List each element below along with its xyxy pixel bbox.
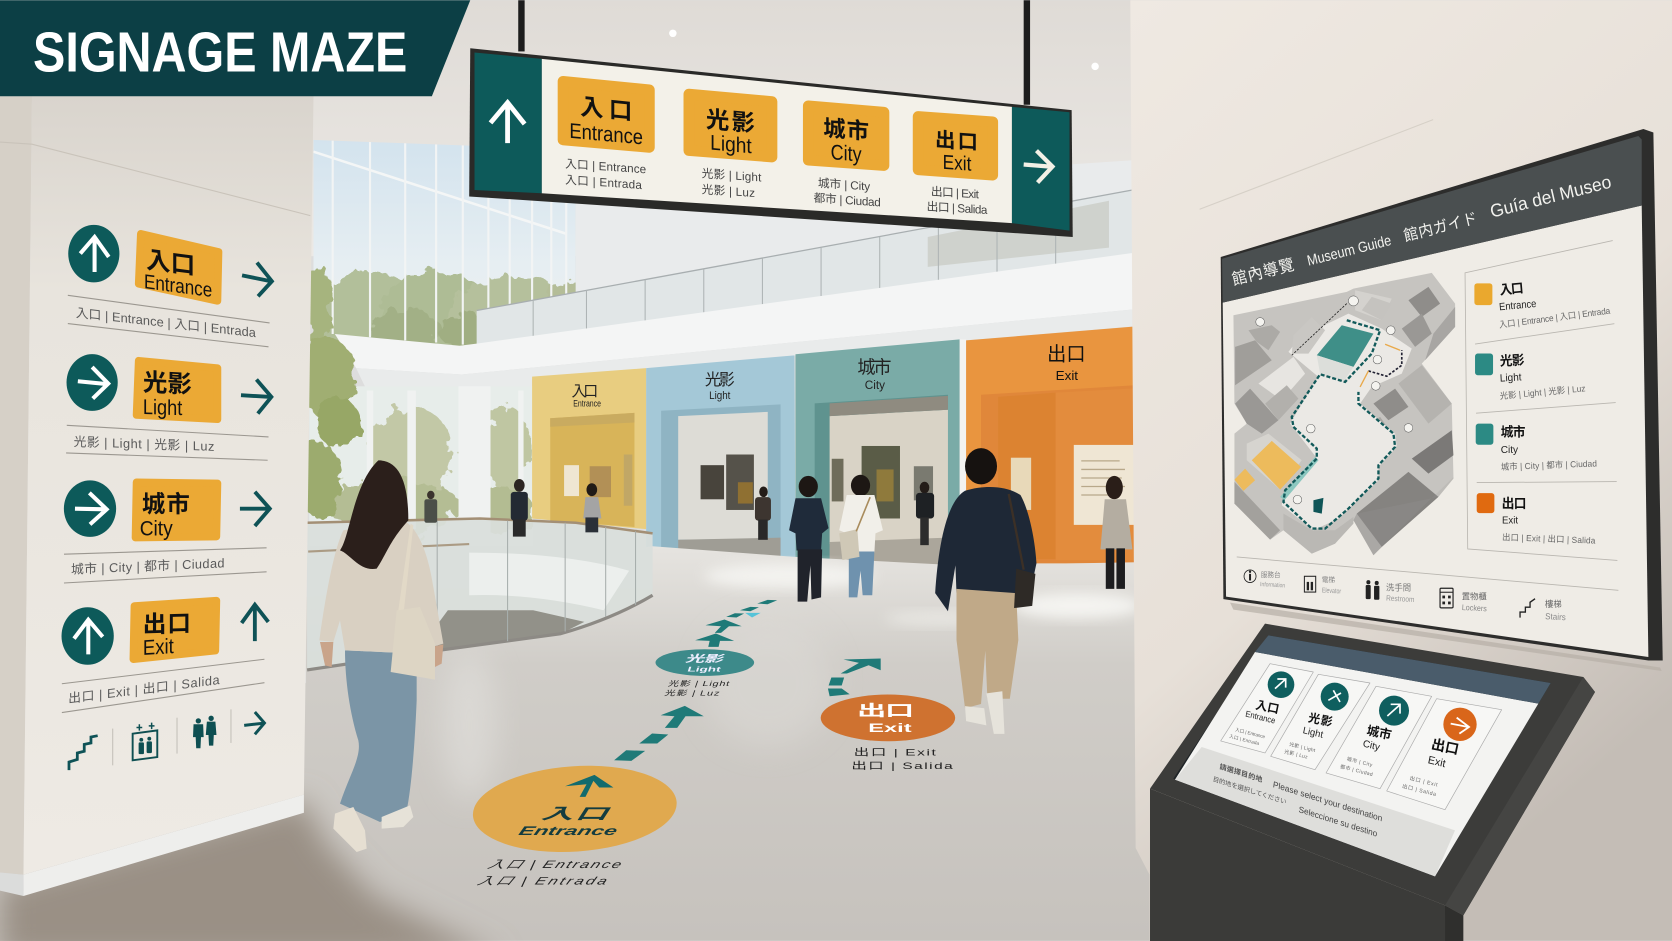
floor marker: Entrance: 入口 | Entrance xyxy=(485,859,624,871)
sign panel: Entrance: Entrance xyxy=(569,119,643,149)
kiosk card: City: 都市 | Ciudad xyxy=(1340,763,1374,778)
wall sign: City row: 城市 | City | 都市 | Ciudad xyxy=(71,555,225,577)
map key icons row: 樓梯 xyxy=(1545,598,1562,609)
floor marker: Light: Light xyxy=(686,666,722,673)
sign panel: Entrance: 入口 | Entrada xyxy=(565,174,642,192)
kiosk body xyxy=(1150,624,1595,941)
map key icons row: 電梯 xyxy=(1322,575,1335,584)
legend: City: City xyxy=(1501,445,1519,456)
up arrow xyxy=(491,103,525,143)
sign panel: City: 都市 | Ciudad xyxy=(814,191,881,209)
kiosk card: City: 城市 xyxy=(1365,723,1393,742)
floor marker: Light: 光影 | Luz xyxy=(664,689,722,697)
wall sign: Light row: 光影 xyxy=(143,369,192,399)
legend: Light: 光影 xyxy=(1499,352,1525,369)
wall sign: Light row: 光影 | Light | 光影 | Luz xyxy=(74,434,214,454)
sign panel: Entrance: 入口 | Entrance xyxy=(565,158,646,176)
kiosk prompt text: Seleccione su destino xyxy=(1298,804,1378,839)
panel: orange gallery bay Exit xyxy=(960,327,1135,565)
floor marker: Light: 光影 xyxy=(684,654,727,665)
sign panel: City: 城市 xyxy=(823,115,869,144)
wall sign: Exit row: Exit xyxy=(143,634,174,660)
panel: curved atrium glass railing xyxy=(307,518,653,670)
kiosk card: City: 城市 | City xyxy=(1346,755,1373,769)
kiosk card: Exit xyxy=(1387,699,1502,810)
header band: 館内ガイド xyxy=(1402,210,1479,245)
map key icons row: 置物櫃 xyxy=(1462,590,1487,601)
legend: City xyxy=(1476,424,1597,472)
legend: Entrance: Entrance xyxy=(1499,299,1537,313)
kiosk card: City xyxy=(1326,686,1432,789)
legend: City: 城市 xyxy=(1501,424,1525,440)
legend: Entrance xyxy=(1474,280,1611,330)
floor marker: Light xyxy=(655,649,754,697)
floor marker: Exit: Exit xyxy=(868,722,913,735)
panel: white upper wall xyxy=(576,160,1132,320)
sign panel: Exit: Exit xyxy=(943,152,972,176)
legend divider xyxy=(1475,324,1614,344)
kiosk card: Exit: 出口 xyxy=(1430,736,1460,757)
panel: yellow gallery bay Entrance xyxy=(532,368,646,529)
legend: Exit: Exit xyxy=(1502,515,1518,527)
panel: lower atrium window with trees xyxy=(310,386,533,522)
sign panel: Light: 光影 | Light xyxy=(702,166,762,184)
floor marker: Exit: 出口 | Salida xyxy=(851,760,954,771)
legend: Exit: 出口 | Exit | 出口 | Salida xyxy=(1502,531,1596,546)
panel: blue gallery bay Light: Light xyxy=(709,390,731,402)
legend frame xyxy=(1465,241,1617,560)
sign panel: Entrance xyxy=(563,81,649,192)
floor marker: Exit xyxy=(821,695,955,771)
visitor in white shirt xyxy=(839,475,883,597)
sign panel: Exit: 出口 xyxy=(935,128,978,154)
wall sign: Entrance row: Entrance xyxy=(144,271,212,302)
header band: Museum Guide xyxy=(1306,233,1393,270)
wall sign: Light row xyxy=(66,354,271,460)
map key icons row: Information xyxy=(1260,581,1286,590)
accent blue chevron xyxy=(745,613,761,618)
isometric floor map xyxy=(1233,273,1455,555)
legend: Light: Light xyxy=(1500,372,1522,385)
legend: Entrance: 入口 xyxy=(1499,280,1524,298)
kiosk card: Entrance: 入口 | Entrance xyxy=(1235,727,1266,740)
interactive touchscreen kiosk xyxy=(1150,624,1595,941)
panel: blue gallery bay Light xyxy=(646,355,795,558)
title banner xyxy=(0,0,470,96)
kiosk card: Light: 光影 | Light xyxy=(1289,741,1316,754)
wall sign: Entrance row: 入口 xyxy=(146,247,195,280)
visitor in navy shirt xyxy=(789,476,829,602)
wall sign: Exit row xyxy=(62,601,268,713)
panel: polished floor xyxy=(0,546,1157,941)
kiosk card: Exit: 出口 | Salida xyxy=(1402,782,1437,798)
sign panel: Light: 光影 | Luz xyxy=(702,182,755,200)
legend divider xyxy=(1476,403,1616,413)
kiosk card: City: City xyxy=(1362,739,1381,753)
floor marker: Exit: 出口 xyxy=(857,702,914,719)
floor marker: Entrance xyxy=(470,759,680,888)
foreground man with messenger bag xyxy=(935,448,1036,734)
legend: City: 城市 | City | 都市 | Ciudad xyxy=(1501,457,1597,472)
museum guide wall board xyxy=(1221,129,1663,671)
legend divider xyxy=(1477,482,1617,483)
sign panel: Entrance: 入口 xyxy=(580,93,632,125)
kiosk card: Light: Light xyxy=(1302,725,1324,741)
foreground tree beside left wall xyxy=(299,262,358,518)
kiosk card: Entrance: 入口 | Entrada xyxy=(1229,734,1260,747)
kiosk card: Exit: Exit xyxy=(1427,754,1447,770)
panel: blue gallery bay Light: 光影 xyxy=(705,371,735,389)
sign panel: City: City xyxy=(831,140,862,167)
floor graphics: wayfinding decals xyxy=(470,600,955,888)
wall sign: Exit row: 出口 xyxy=(143,610,191,638)
hanging directory sign xyxy=(469,0,1073,237)
kiosk card: Light xyxy=(1271,674,1370,770)
floor marker: Entrance: Entrance xyxy=(517,825,619,838)
wall sign: service icons row xyxy=(69,709,264,770)
header band: Guía del Museo xyxy=(1488,171,1613,222)
map key icons row: 洗手間 xyxy=(1386,581,1411,593)
foreground woman with tote bag xyxy=(319,460,443,852)
kiosk prompt text: Please select your destination xyxy=(1272,779,1383,823)
header band xyxy=(1222,136,1642,303)
floor marker: Entrance: 入口 xyxy=(538,805,616,822)
sign panel: Light xyxy=(689,94,772,200)
map key icons row: Restroom xyxy=(1386,593,1415,604)
right arrow xyxy=(1024,151,1052,183)
ceiling spot lights xyxy=(669,30,1099,70)
sign panel: Light: Light xyxy=(710,131,752,158)
wall sign: Entrance row xyxy=(68,225,272,347)
panel: orange gallery bay Exit: Exit xyxy=(1056,368,1078,383)
legend: Exit xyxy=(1477,493,1596,546)
sign panel: Exit: 出口 | Exit xyxy=(931,184,980,201)
sign panel: City: 城市 | City xyxy=(818,176,870,194)
panel: orange gallery bay Exit: 出口 xyxy=(1047,344,1086,366)
map key icons row: 服務台 xyxy=(1261,570,1281,579)
kiosk card: Light: 光影 xyxy=(1307,711,1334,729)
kiosk card: Entrance: 入口 xyxy=(1254,698,1281,716)
legend: Entrance: 入口 | Entrance | 入口 | Entrada xyxy=(1498,305,1611,330)
board frame xyxy=(1221,129,1663,660)
kiosk card: Light: 光影 | Luz xyxy=(1284,748,1309,761)
map key icons row: Lockers xyxy=(1462,603,1487,613)
panel: yellow gallery bay Entrance: 入口 xyxy=(572,383,598,400)
panel: right wall xyxy=(1130,0,1672,941)
legend: Light xyxy=(1475,352,1586,401)
kiosk prompt text: 目的地を選択してください xyxy=(1212,774,1287,806)
map key icons row: Stairs xyxy=(1545,611,1566,622)
kiosk card: Exit: 出口 | Exit xyxy=(1409,774,1439,789)
floor marker: Light: 光影 | Light xyxy=(667,679,731,688)
sign panel: Exit xyxy=(918,116,993,217)
kiosk card: Entrance: Entrance xyxy=(1245,709,1277,726)
board face xyxy=(1223,205,1648,657)
screen xyxy=(1173,635,1551,876)
panel: teal gallery bay City xyxy=(795,339,960,569)
kiosk prompt text: 請選擇目的地 xyxy=(1219,762,1263,784)
sign panel: City xyxy=(808,106,884,209)
kiosk card: Entrance xyxy=(1221,664,1313,753)
title banner: SIGNAGE MAZE xyxy=(33,21,407,84)
map key icons row: Elevator xyxy=(1322,587,1342,596)
panel: teal gallery bay City: City xyxy=(865,378,886,392)
kiosk prompt text xyxy=(1212,762,1383,839)
wall sign: Light row: Light xyxy=(143,395,182,420)
panel: yellow gallery bay Entrance: Entrance xyxy=(573,399,601,409)
wall sign: City row: 城市 xyxy=(142,490,190,517)
dashed route arrows xyxy=(614,600,881,761)
header band: 館內導覽 xyxy=(1230,255,1296,289)
floor marker: Entrance: 入口 | Entrada xyxy=(475,875,610,888)
panel: upper atrium window xyxy=(314,140,576,346)
floor marker: Exit: 出口 | Exit xyxy=(854,747,936,758)
distant visitors xyxy=(424,476,1132,589)
map key icons row xyxy=(1237,557,1618,622)
sign panel: Exit: 出口 | Salida xyxy=(927,199,988,217)
panel: left wall xyxy=(0,96,314,896)
wall sign: City row xyxy=(64,480,270,583)
sign panel: Light: 光影 xyxy=(706,106,755,137)
panel: upper balcony with glass railing xyxy=(335,190,1132,395)
wall sign: City row: City xyxy=(140,517,173,541)
panel: teal gallery bay City: 城市 xyxy=(857,357,891,377)
legend: Light: 光影 | Light | 光影 | Luz xyxy=(1499,382,1586,401)
panel: interior background ceiling xyxy=(299,0,1152,256)
wall sign: Exit row: 出口 | Exit | 出口 | Salida xyxy=(68,672,221,706)
legend: Exit: 出口 xyxy=(1502,496,1526,511)
wall sign: Entrance row: 入口 | Entrance | 入口 | Entrada xyxy=(76,305,257,340)
